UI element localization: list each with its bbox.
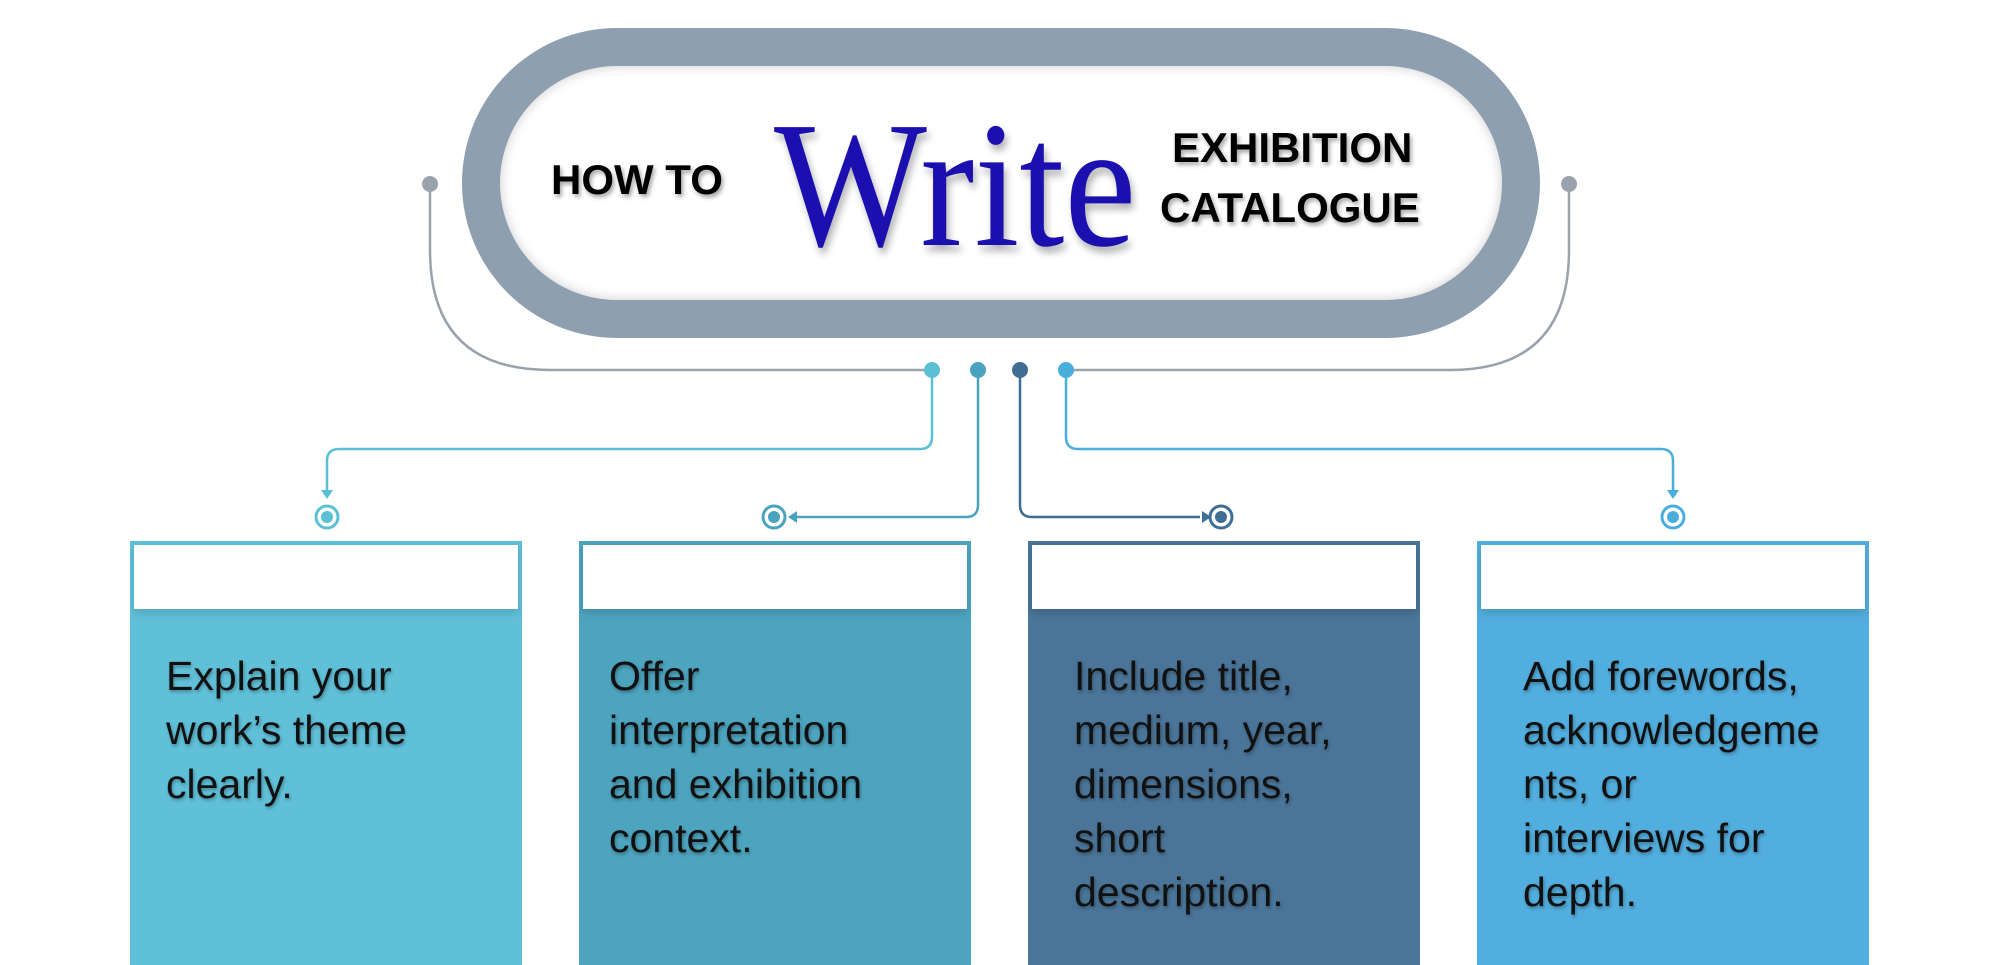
box 1: Explain your work’s theme clearly. <box>166 653 407 807</box>
title: exhibition catalogue <box>1160 124 1422 231</box>
title pill <box>462 28 1540 338</box>
box 2: Offer interpretation and exhibition context. <box>609 653 862 861</box>
box 3: Include title, medium, year, dimensions, short description. <box>1074 653 1332 915</box>
box 3 <box>1028 541 1420 965</box>
title: write: Write <box>774 85 1136 284</box>
box 4 <box>1477 541 1869 965</box>
title: exhibition catalogue: CATALOGUE <box>1160 184 1420 231</box>
title: how to: HOW TO <box>551 156 723 203</box>
box 1 <box>130 541 522 965</box>
box 4: Add forewords, acknowledgeme nts, or interviews for depth. <box>1523 653 1819 915</box>
title: exhibition catalogue: EXHIBITION <box>1172 124 1412 171</box>
box 2 <box>579 541 971 965</box>
